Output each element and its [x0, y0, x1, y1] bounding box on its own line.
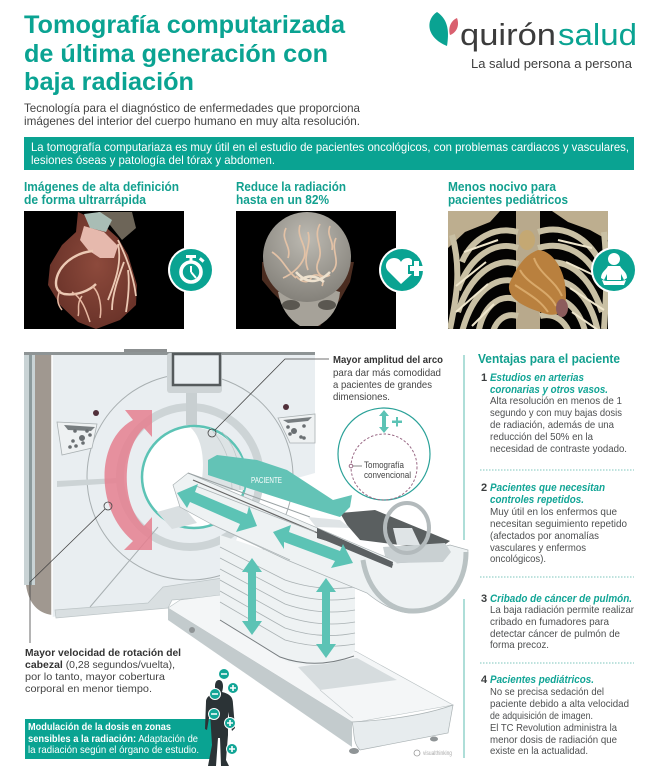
- speaker right: [278, 404, 315, 443]
- banner: La tomografía computariaza es muy útil en el estudio de pacientes oncológicos, con problemas cardiacos y vasculares,: [31, 140, 629, 154]
- item 1: Alta resolución en menos de 1: [490, 395, 622, 407]
- title: de última generación con: [24, 40, 328, 68]
- item 3: forma precoz.: [490, 639, 549, 651]
- item 4: de adquisición de imagen.: [490, 710, 593, 722]
- item 2: oncológicos).: [490, 553, 546, 565]
- monitor: [167, 353, 222, 425]
- item 1: Estudios en arterias: [490, 372, 584, 384]
- item 3: detectar cáncer de pulmón de: [490, 628, 620, 640]
- item 2: (afectados por anomalías: [490, 530, 599, 542]
- callout: modulación de la dosis: [25, 719, 212, 759]
- patient: [208, 455, 352, 517]
- item 4: 4: [481, 674, 488, 686]
- brand mark: visualthinking: [414, 750, 452, 757]
- item 4: menor dosis de radiación que: [490, 734, 617, 746]
- head holder: [340, 503, 451, 563]
- diagram: arc comparison: [338, 408, 430, 500]
- arrow: vertical left: [242, 558, 262, 635]
- diagram: arc comparison: convencional: [364, 470, 411, 480]
- callout: amplitud del arco: para dar más comodidad: [333, 367, 441, 379]
- title: baja radiación: [24, 68, 194, 96]
- image: heart scan: [24, 211, 184, 329]
- item 2: Pacientes que necesitan: [490, 482, 605, 494]
- item 1: coronarias y otros vasos.: [490, 384, 608, 396]
- item 3: 3: [481, 593, 487, 605]
- gantry panel details: [55, 374, 293, 618]
- brand mark: visualthinking: visualthinking: [423, 751, 452, 757]
- icon: stopwatch: [168, 247, 214, 293]
- item 2: Muy útil en los enfermos que: [490, 506, 617, 518]
- item 3: La baja radiación permite realizar: [490, 604, 634, 616]
- arrow: vertical right: [316, 578, 336, 658]
- callout: velocidad de rotación: Mayor velocidad de rotación del: [25, 647, 181, 659]
- callout: modulación de la dosis: la radiación según el órgano de estudio.: [28, 744, 199, 756]
- callout: modulación de la dosis: Modulación de la dosis en zonas: [28, 721, 171, 733]
- item 1: [481, 372, 627, 455]
- bellows column: [220, 535, 355, 665]
- heading: pediátricos: [448, 180, 568, 207]
- banner: [24, 137, 634, 170]
- subtitle: [24, 101, 360, 128]
- figure: human body with dose markers: [205, 668, 238, 766]
- callout: amplitud del arco: [333, 354, 443, 403]
- heading: reduce radiación: Reduce la radiación: [236, 180, 346, 194]
- callout: amplitud del arco: Mayor amplitud del arco: [333, 354, 443, 366]
- icon: heart plus: [379, 247, 425, 293]
- table and cradle: [173, 473, 468, 613]
- item 1: 1: [481, 372, 487, 384]
- arrow: table left: [177, 484, 257, 532]
- arrow: table right: [273, 525, 353, 568]
- subtitle: Tecnología para el diagnóstico de enfermedades que proporciona: [24, 101, 360, 115]
- callout: amplitud del arco: a pacientes de grandes: [333, 379, 432, 391]
- item 4: El TC Revolution administra la: [490, 722, 617, 734]
- logo: quirónsalud: quirón: [460, 17, 556, 52]
- icon: baby: [591, 247, 637, 293]
- callout: velocidad de rotación: corporal en menor tiempo.: [25, 683, 152, 695]
- logo: quirónsalud: [429, 12, 637, 71]
- callout: velocidad de rotación: cabezal (0,28 segundos/vuelta),: [25, 659, 175, 671]
- heading: alta definición: de forma ultrarrápida: [24, 193, 147, 207]
- item 1: de radiación, además de una: [490, 419, 614, 431]
- banner: lesiones óseas y patología del tórax y abdomen.: [31, 153, 275, 167]
- heading: pediátricos: pacientes pediátricos: [448, 193, 568, 207]
- bore: [142, 426, 246, 529]
- heading: pediátricos: Menos nocivo para: [448, 180, 557, 194]
- item 4: Pacientes pediátricos.: [490, 674, 594, 686]
- callout line: velocidad: [30, 502, 112, 643]
- item 2: [481, 482, 627, 565]
- image: skull scan: [236, 211, 396, 329]
- illustration: CT scanner: [24, 349, 468, 754]
- logo: quirónsalud: La salud persona a persona: [471, 56, 633, 71]
- item 3: cribado en fumadores para: [490, 616, 609, 628]
- patient: PACIENTE: [251, 476, 282, 485]
- panel: ventajas para el paciente: [464, 351, 634, 758]
- image: ribcage scan: [448, 211, 608, 335]
- heading: alta definición: Imágenes de alta definición: [24, 180, 179, 194]
- item 4: [481, 674, 629, 757]
- item 2: 2: [481, 482, 487, 494]
- item 1: reducción del 50% en la: [490, 431, 593, 443]
- callout: modulación de la dosis: sensibles a la radiación: Adaptación de: [28, 733, 198, 745]
- item 1: segundo y con muy bajas dosis: [490, 407, 622, 419]
- heading: alta definición: [24, 180, 179, 207]
- arrow: gantry rotation: [104, 410, 152, 550]
- callout: velocidad de rotación: [25, 647, 181, 695]
- item 2: controles repetidos.: [490, 494, 584, 506]
- panel heading: Ventajas para el paciente: [478, 351, 620, 366]
- title: [24, 11, 346, 96]
- scanner base: [168, 595, 453, 754]
- item 2: vasculares y enfermos: [490, 542, 586, 554]
- speaker left: [57, 410, 99, 455]
- callout: amplitud del arco: dimensiones.: [333, 391, 390, 403]
- diagram: arc comparison: Tomografía: [364, 460, 404, 470]
- subtitle: imágenes del interior del cuerpo humano en muy alta resolución.: [24, 114, 360, 128]
- item 4: existe en la actualidad.: [490, 745, 588, 757]
- gantry frame: [24, 349, 315, 617]
- heading: reduce radiación: [236, 180, 346, 207]
- logo: quirónsalud: salud: [558, 17, 637, 52]
- item 2: necesitan seguimiento repetido: [490, 518, 627, 530]
- callout: velocidad de rotación: por lo tanto, mayor cobertura: [25, 671, 165, 683]
- heading: reduce radiación: hasta en un 82%: [236, 193, 329, 207]
- item 1: necesidad de contraste yodado.: [490, 443, 627, 455]
- item 3: [481, 593, 634, 651]
- item 4: paciente debido a alta velocidad: [490, 698, 629, 710]
- callout line: arco: [208, 359, 329, 437]
- item 4: No se precisa sedación del: [490, 686, 604, 698]
- title: Tomografía computarizada: [24, 11, 346, 39]
- item 3: Cribado de cáncer de pulmón.: [490, 593, 632, 605]
